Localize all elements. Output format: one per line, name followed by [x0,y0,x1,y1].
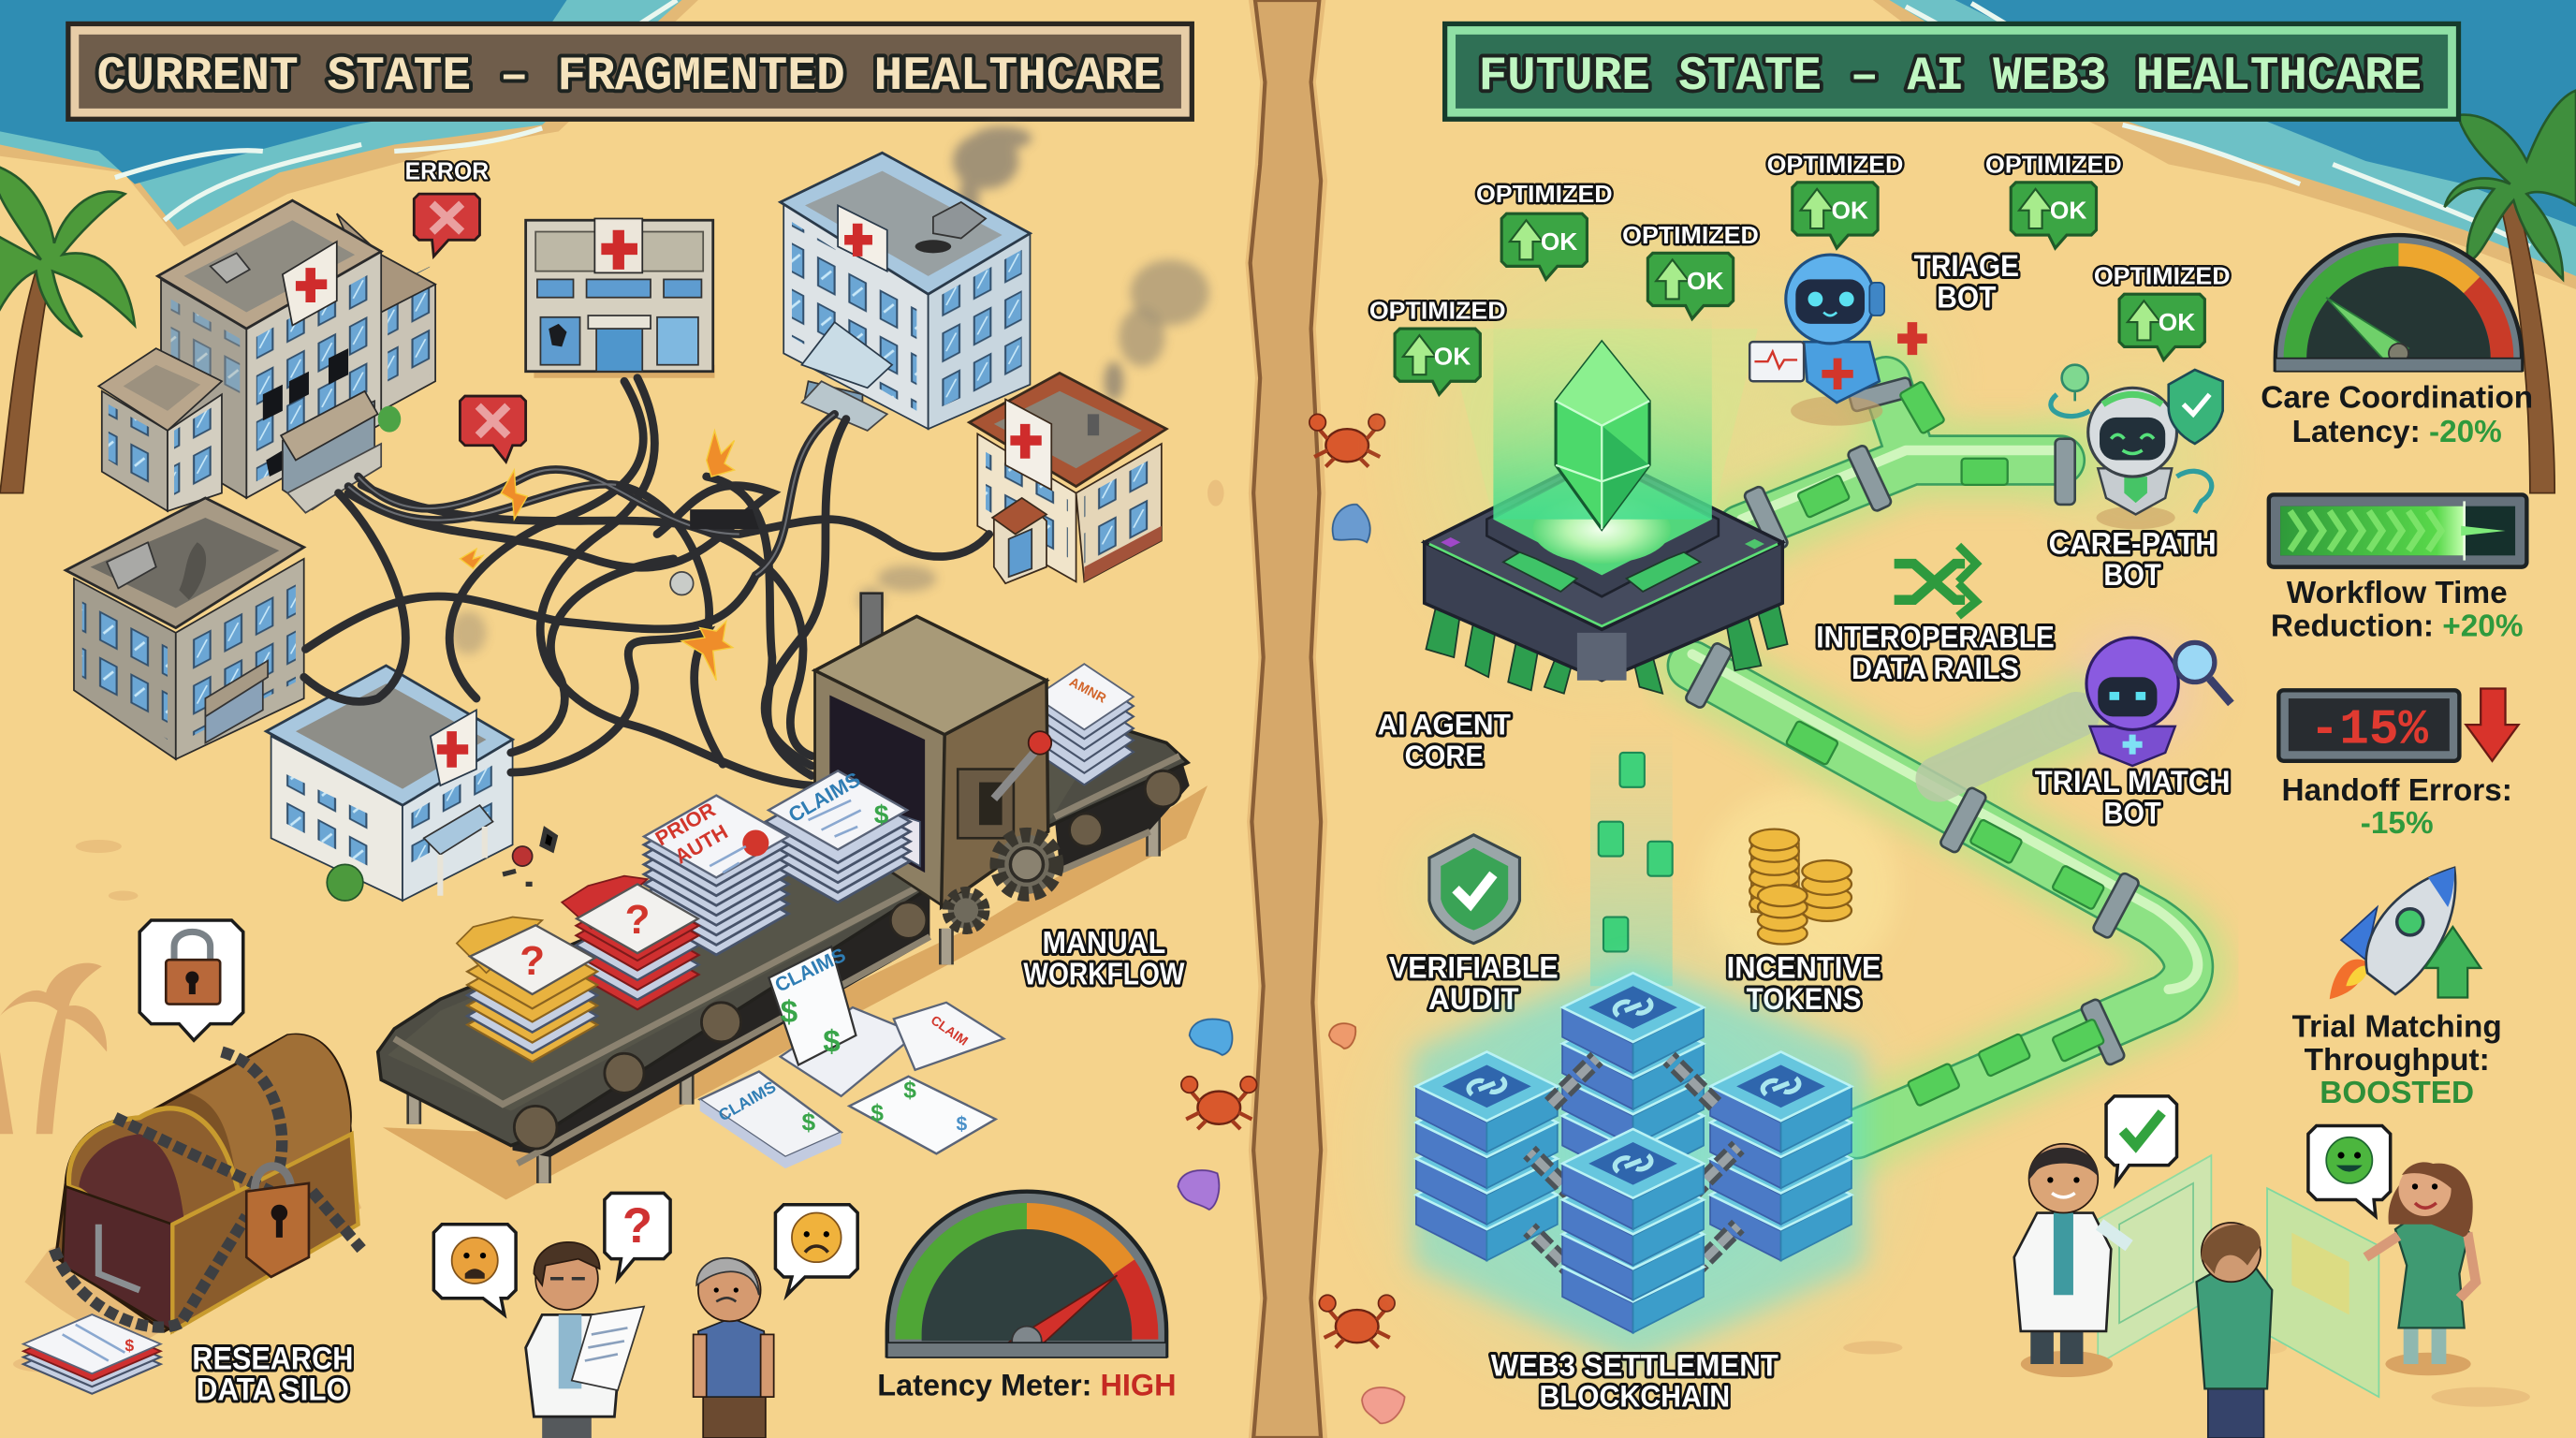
label: care-path bot: CARE-PATH [2049,527,2217,561]
hospital: gray damaged tower [98,200,435,513]
label: verifiable audit: VERIFIABLE [1389,950,1559,984]
banner: future state: FUTURE STATE – AI WEB3 HEALTHCARE [1479,51,2422,104]
trial matching metric: BOOSTED [2320,1076,2474,1110]
loose claim papers: $ [956,1114,967,1136]
label: trial match bot: TRIAL MATCH [2035,765,2231,799]
handoff error readout: -15% [2310,701,2428,757]
cable highlights and sparks [348,414,835,681]
right ocean [1873,0,2576,289]
right palm tree [2445,91,2576,493]
folder stack: yellow [457,917,597,1062]
rocket [2330,868,2455,999]
label: research data silo: RESEARCH [192,1341,353,1376]
paper stack beyond machine [1035,664,1134,785]
care coordination metric: Care Coordination [2261,380,2533,415]
decorative crabs and shells [1178,414,1405,1423]
workflow time metric: Workflow Time [2287,576,2508,610]
holographic panels [2098,1155,2378,1397]
green glow field [1323,165,2267,1430]
frown bubble [775,1205,857,1295]
green up arrow [2425,927,2481,998]
palm shadow [0,963,107,1134]
pipe couplings and data capsules [1685,376,2140,1107]
banner: future state [1442,22,2461,122]
care coordination metric: Latency: -20% [2292,415,2502,449]
sad emoji bubble [433,1225,516,1314]
label: AI agent core [1378,708,1511,772]
data rail pipes [1692,381,2198,1134]
processing machine: PRIO [869,821,908,852]
label: incentive tokens: TOKENS [1747,982,1862,1016]
AI agent core [1425,319,1788,694]
question bubble: ? [622,1198,652,1254]
patient from behind [2197,1223,2272,1438]
label: triage bot: BOT [1937,280,1997,314]
central sand divider [1245,0,1327,1438]
folder stack: yellow: ? [520,938,545,984]
handoff error readout [2278,690,2459,761]
lock speech bubble [139,920,243,1040]
care coordination metric [2261,380,2533,449]
label: AI agent core: CORE [1405,739,1484,772]
left palm tree [0,165,135,493]
loose claim papers [700,945,1003,1168]
incentive token coins [1749,829,1852,944]
loose claim papers: $ [801,1108,815,1137]
label: care-path bot [2049,527,2217,592]
worried doctor [526,1242,644,1438]
triage bot [1749,255,1927,426]
optimized badges: OK [2159,308,2195,336]
optimized badges: OK [1832,196,1868,224]
workflow time metric [2271,576,2523,643]
small research papers: $ [124,1336,134,1355]
falling tokens [1590,723,1673,986]
label: trial match bot: BOT [2103,796,2161,829]
paper stack: prior auth: PRIOR [651,798,720,850]
smiling doctor [2014,1144,2130,1377]
latency meter label: Latency Meter: HIGH [877,1368,1177,1401]
label: triage bot [1914,249,2019,314]
small research papers [23,1314,161,1394]
trial matching metric: Trial Matching [2292,1010,2502,1045]
label: triage bot: TRIAGE [1914,249,2019,283]
hospital: red-roof clinic [970,373,1166,583]
label: research data silo [192,1341,353,1408]
handoff errors metric [2282,773,2512,841]
label: manual workflow: WORKFLOW [1023,957,1185,992]
latency gauge [887,1192,1166,1357]
folder stack: red [562,876,699,1009]
banner: current state [66,22,1194,122]
paper stack beyond machine: AMNR [1067,674,1109,706]
paper stack: claims: CLAIMS [784,768,864,827]
sand patches [13,480,2530,1407]
trial match bot [2086,638,2231,766]
tangled cables [304,378,989,785]
care coordination gauge [2276,235,2522,372]
banner: current state: CURRENT STATE – FRAGMENTED HEALTHCARE [97,51,1162,104]
trial matching metric [2292,1010,2502,1110]
conveyor belt [378,723,1208,1199]
workflow progress bar [2269,494,2526,567]
label: web3 settlement blockchain [1491,1348,1778,1414]
hospital: dark lower-left [66,498,304,759]
optimized badges: OK [1541,227,1577,256]
label: care-path bot: BOT [2103,558,2161,592]
label: research data silo: DATA SILO [197,1372,349,1408]
optimized badges: OK [2050,196,2086,224]
verifiable audit shield [1429,835,1519,944]
optimized badges [1369,150,2231,394]
handoff errors metric: Handoff Errors: [2282,773,2512,808]
shuffle icon [1895,546,1976,616]
folder stack: red: ? [625,897,650,943]
paper stack: claims: $ [874,800,889,829]
left ocean [0,0,698,246]
optimized badges: OPTIMIZED [2094,262,2231,290]
paper stack: prior auth [644,796,788,955]
optimized badges: OK [1687,267,1724,295]
label: verifiable audit [1389,950,1559,1016]
optimized badges: OPTIMIZED [1369,297,1506,325]
optimized badges: OPTIMIZED [1476,180,1613,208]
loose claim papers: $ [871,1101,884,1126]
processing machine [815,594,1057,929]
label: trial match bot [2035,765,2231,829]
blockchain stacks [1412,961,1865,1364]
label: web3 settlement blockchain: BLOCKCHAIN [1540,1380,1730,1414]
check bubble [2106,1096,2177,1183]
error bubble [460,396,526,462]
red down arrow [2466,689,2519,761]
workflow time metric: Reduction: +20% [2271,609,2523,643]
error bubble with label [405,156,489,257]
hospital: lower-center white [266,666,555,901]
hospital: central clinic [526,218,714,378]
care-path bot [2051,365,2223,529]
label: incentive tokens: INCENTIVE [1727,950,1881,984]
paper stack: claims [766,768,910,902]
loose claim papers: $ [903,1078,916,1104]
handoff errors metric: -15% [2361,806,2434,841]
label: incentive tokens [1727,950,1881,1016]
question bubble [605,1193,670,1279]
smile bubble [2308,1125,2391,1216]
paper stack: prior auth: AUTH [670,820,732,869]
loose claim papers: CLAIMS [715,1077,780,1124]
worried patient [694,1258,774,1438]
label: manual workflow: MANUAL [1043,926,1165,961]
label: interoperable data rails [1816,621,2055,685]
optimized badges: OPTIMIZED [1767,150,1903,178]
smiling nurse [2365,1162,2476,1375]
loose claim papers: $ [823,1024,841,1059]
treasure chest data silo [24,1034,361,1340]
label: manual workflow [1023,926,1185,992]
hospital: blue tower [781,153,1030,431]
loose claim papers: CLAIM [929,1012,971,1049]
label: interoperable data rails: INTEROPERABLE [1816,621,2055,654]
label: web3 settlement blockchain: WEB3 SETTLEMENT [1491,1348,1778,1382]
trial matching metric: Throughput: [2305,1043,2490,1078]
error bubble with label: ERROR [405,156,489,184]
optimized badges: OK [1434,343,1471,371]
smoke plumes [450,126,1209,654]
loose claim papers: CLAIMS [772,945,849,997]
label: verifiable audit: AUDIT [1428,982,1519,1016]
label: interoperable data rails: DATA RAILS [1852,652,2019,685]
optimized badges: OPTIMIZED [1985,150,2122,178]
optimized badges: OPTIMIZED [1622,221,1759,249]
loose claim papers: $ [781,995,798,1030]
label: AI agent core: AI AGENT [1378,708,1511,741]
